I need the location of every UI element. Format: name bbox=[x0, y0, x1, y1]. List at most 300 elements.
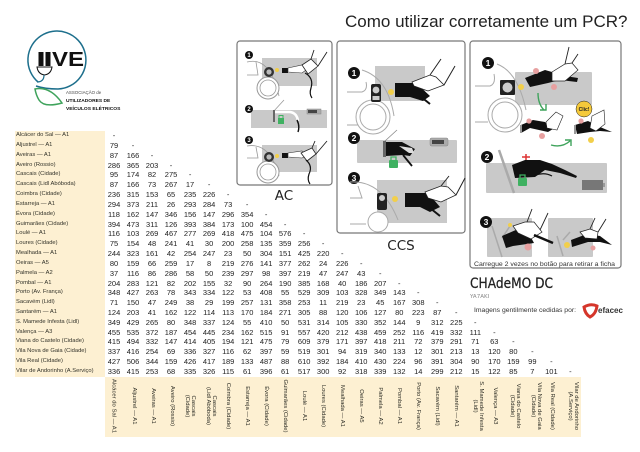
table: distance values: 459 bbox=[374, 328, 386, 337]
table: row labels: Vilar de Andorinho (A.Serviço) bbox=[16, 368, 94, 374]
step 3 CCS: 3 bbox=[352, 173, 357, 183]
step 2 CCS bbox=[348, 130, 457, 168]
table: distance values: 326 bbox=[203, 367, 215, 376]
table: column labels: Pombal — A1 bbox=[396, 388, 402, 424]
table: distance values: 244 bbox=[108, 249, 120, 258]
logo caption bbox=[66, 90, 121, 112]
table: distance values: 301 bbox=[431, 347, 444, 356]
table: distance values: 535 bbox=[127, 328, 139, 337]
table: distance values: 92 bbox=[338, 367, 346, 376]
table: distance values: 14 bbox=[414, 367, 422, 376]
table: distance values: 71 bbox=[110, 298, 118, 307]
table: distance values: 283 bbox=[127, 279, 139, 288]
table: distance values: - bbox=[284, 220, 286, 229]
table: distance values: 7 bbox=[530, 367, 534, 376]
table: distance values: 212 bbox=[336, 328, 348, 337]
table: distance values: 377 bbox=[279, 259, 291, 268]
table: distance values: 311 bbox=[146, 220, 158, 229]
table: distance values: - bbox=[227, 190, 229, 199]
table: distance values: 494 bbox=[127, 337, 139, 346]
table: distance values: 309 bbox=[317, 288, 329, 297]
table: row labels: Sacavém (Lidl) bbox=[16, 299, 55, 305]
table: distance values: 397 bbox=[260, 347, 272, 356]
table: distance values: 53 bbox=[243, 288, 251, 297]
table: distance values: 135 bbox=[260, 239, 272, 248]
table: distance values: 13 bbox=[471, 347, 479, 356]
table: distance values: 529 bbox=[298, 288, 310, 297]
table: distance values: 48 bbox=[148, 239, 156, 248]
table: distance values: 62 bbox=[243, 347, 251, 356]
table: distance values: 576 bbox=[279, 229, 291, 238]
table: distance values: 517 bbox=[298, 367, 310, 376]
table: distance values: 336 bbox=[108, 367, 120, 376]
table: distance values: 224 bbox=[393, 357, 406, 366]
table: distance values: 397 bbox=[279, 269, 291, 278]
table: distance values: 247 bbox=[203, 249, 215, 258]
table: column labels: Viana do Castelo bbox=[515, 384, 521, 429]
table: distance values: 365 bbox=[127, 161, 139, 170]
table: distance values: 58 bbox=[186, 269, 194, 278]
table: distance values: 207 bbox=[374, 279, 386, 288]
table: distance values: 69 bbox=[167, 347, 175, 356]
table: distance values: 171 bbox=[336, 337, 348, 346]
table: distance values: 68 bbox=[167, 367, 175, 376]
table: distance values: 410 bbox=[260, 318, 272, 327]
table: distance values: 94 bbox=[338, 347, 346, 356]
table: distance values: 37 bbox=[110, 269, 118, 278]
table: distance values: 519 bbox=[298, 347, 310, 356]
table: column labels: Aljustrel — A1 bbox=[131, 388, 137, 424]
table: row labels: Pombal — A1 bbox=[16, 280, 51, 286]
table: distance values: 373 bbox=[127, 200, 139, 209]
table: distance values: 415 bbox=[127, 367, 139, 376]
logo: UVE association bbox=[28, 31, 121, 112]
table: distance values: 113 bbox=[222, 308, 234, 317]
step 2 AC: 2 bbox=[247, 107, 251, 113]
table: distance values: 66 bbox=[148, 259, 156, 268]
table: row labels: Vila Nova de Gaia (Cidade) bbox=[16, 348, 86, 354]
table: distance values: 247 bbox=[336, 269, 348, 278]
table: row labels: Porto (Av. França) bbox=[16, 289, 63, 295]
table: distance values: 284 bbox=[203, 200, 215, 209]
table: distance values: 103 bbox=[127, 229, 139, 238]
table: distance values: - bbox=[360, 259, 362, 268]
table: distance values: 23 bbox=[357, 298, 365, 307]
table: distance values: 348 bbox=[108, 288, 120, 297]
table: distance values: 609 bbox=[298, 337, 310, 346]
table: distance values: 120 bbox=[488, 347, 501, 356]
table: row labels: Cascais (Cidade) bbox=[16, 171, 60, 177]
table: distance values: 323 bbox=[127, 249, 139, 258]
table: distance values: 410 bbox=[355, 357, 367, 366]
table: distance values: 211 bbox=[146, 200, 158, 209]
table: row labels: Aveiras — A1 bbox=[16, 152, 51, 158]
panel: CHAdeMO bbox=[470, 41, 621, 268]
table: distance values: 328 bbox=[355, 288, 367, 297]
table: column labels bbox=[110, 379, 579, 433]
table: distance values: 358 bbox=[279, 298, 291, 307]
step 2 CCS: 2 bbox=[352, 133, 357, 143]
table: distance values: 344 bbox=[146, 357, 158, 366]
table: distance values: 132 bbox=[393, 367, 406, 376]
table: distance values: 23 bbox=[224, 249, 232, 258]
table: distance values: 213 bbox=[450, 347, 463, 356]
table: distance values: 159 bbox=[127, 259, 139, 268]
step 1 AC bbox=[245, 50, 327, 99]
table: distance values: 115 bbox=[222, 367, 234, 376]
table: distance values: 133 bbox=[241, 357, 253, 366]
table: row labels: Oeiras — A5 bbox=[16, 260, 49, 266]
table: row labels: Aljustrel — A1 bbox=[16, 142, 52, 148]
table: column labels: Porto (Av. França) bbox=[415, 382, 421, 430]
table: distance values: 147 bbox=[146, 210, 158, 219]
table: distance values: 85 bbox=[509, 367, 518, 376]
table: distance values: 127 bbox=[374, 308, 386, 317]
table: distance values: 162 bbox=[127, 210, 139, 219]
icon: click burst: Clic! bbox=[579, 107, 590, 113]
table: distance values: 379 bbox=[317, 337, 329, 346]
table: row labels: Coimbra (Cidade) bbox=[16, 191, 62, 197]
table: distance values: 15 bbox=[471, 367, 479, 376]
step 3 CCS bbox=[348, 172, 465, 232]
table: row labels bbox=[15, 131, 105, 377]
table: distance values: - bbox=[246, 200, 248, 209]
table: distance values: 392 bbox=[317, 357, 329, 366]
table: distance values: 336 bbox=[184, 347, 196, 356]
table: distance values: 61 bbox=[243, 367, 251, 376]
table: distance values: 202 bbox=[184, 279, 196, 288]
table: distance values: 226 bbox=[336, 259, 348, 268]
table: distance values: 427 bbox=[127, 288, 139, 297]
table: distance values: 352 bbox=[374, 318, 386, 327]
table: distance values: 235 bbox=[184, 190, 196, 199]
table: distance values: 414 bbox=[184, 337, 196, 346]
table: distance values: 340 bbox=[374, 347, 386, 356]
table: column labels: Coimbra (Cidade) bbox=[225, 383, 231, 429]
caption: CHAdeMO: Carregue 2 vezes no botão para retirar a ficha bbox=[474, 261, 615, 268]
table: distance values: 79 bbox=[281, 337, 289, 346]
table: distance values: 349 bbox=[374, 288, 386, 297]
table: distance values: 405 bbox=[203, 337, 215, 346]
table: distance values: 87 bbox=[433, 308, 441, 317]
table: distance values: - bbox=[113, 131, 115, 140]
table: distance values: 219 bbox=[298, 269, 310, 278]
table: distance values: - bbox=[436, 298, 439, 307]
table: distance values: 88 bbox=[319, 308, 327, 317]
table: distance values: - bbox=[151, 151, 153, 160]
table: column labels: Loulé — A1 bbox=[301, 391, 307, 421]
table: distance values: 203 bbox=[146, 161, 158, 170]
table: distance values: - bbox=[550, 357, 553, 366]
table: distance values: 159 bbox=[507, 357, 520, 366]
table: distance values: 78 bbox=[167, 288, 175, 297]
table: distance values: 124 bbox=[108, 308, 120, 317]
table: distance values: 259 bbox=[165, 259, 177, 268]
table: distance values: 75 bbox=[110, 239, 118, 248]
table: distance values: 90 bbox=[471, 357, 479, 366]
table: distance values: 116 bbox=[412, 328, 424, 337]
step 2 CHAdeMO: 2 bbox=[485, 152, 490, 162]
table: distance values: 258 bbox=[241, 239, 253, 248]
table: distance values bbox=[108, 131, 572, 376]
table: distance values: 116 bbox=[222, 347, 234, 356]
table: distance values: 396 bbox=[260, 367, 272, 376]
table: distance values: 337 bbox=[203, 318, 215, 327]
table: distance values: 147 bbox=[203, 210, 215, 219]
table: distance values: 162 bbox=[165, 308, 177, 317]
table: column labels: Aveiras — A1 bbox=[150, 388, 156, 424]
table: distance values: 506 bbox=[127, 357, 139, 366]
table: distance values: - bbox=[455, 308, 458, 317]
table: distance values: - bbox=[569, 367, 572, 376]
table: column labels: Sacavém (Lidl) bbox=[434, 386, 440, 426]
table: distance values: 330 bbox=[355, 318, 367, 327]
table: distance values: 275 bbox=[165, 170, 177, 179]
table: distance values: 82 bbox=[167, 279, 175, 288]
table: distance values: 223 bbox=[412, 308, 425, 317]
table: distance values: 122 bbox=[488, 367, 501, 376]
table: distance values: 41 bbox=[148, 308, 156, 317]
table: distance values: 286 bbox=[165, 269, 177, 278]
table: distance values: 304 bbox=[450, 357, 463, 366]
table: distance values: 234 bbox=[222, 328, 234, 337]
table: distance values: 426 bbox=[184, 357, 196, 366]
table: distance values: 417 bbox=[203, 357, 215, 366]
table: distance values: 131 bbox=[260, 298, 272, 307]
table: column labels: Santarém — A1 bbox=[453, 385, 459, 427]
table: distance values: 86 bbox=[148, 269, 156, 278]
table: distance values: 24 bbox=[319, 259, 327, 268]
table: distance values: 96 bbox=[414, 357, 422, 366]
table: row labels: Santarém — A1 bbox=[16, 309, 57, 315]
table: distance values: 515 bbox=[260, 328, 272, 337]
table: distance values: 219 bbox=[222, 259, 234, 268]
label: CHAdeMO DC: CHAdeMO DC bbox=[470, 276, 553, 292]
logo: efacec: efacec bbox=[598, 306, 623, 315]
table: distance values: 475 bbox=[260, 337, 272, 346]
table: distance values: 17 bbox=[186, 180, 194, 189]
table: distance values: 111 bbox=[470, 328, 481, 337]
table: distance values: 41 bbox=[186, 239, 194, 248]
table: column labels: Oeiras — A5 bbox=[358, 389, 364, 423]
table: distance values: 203 bbox=[127, 308, 139, 317]
table: distance values: 141 bbox=[260, 259, 272, 268]
table: distance values: 55 bbox=[281, 288, 289, 297]
table: row labels: Valença — A3 bbox=[16, 329, 52, 335]
table: distance values: - bbox=[303, 229, 305, 238]
table: row labels: Guimarães (Cidade) bbox=[16, 221, 68, 227]
table: distance values: 394 bbox=[108, 220, 120, 229]
table: column labels: Vila Real (Cidade) bbox=[549, 382, 555, 430]
table: row labels: Mealhada — A1 bbox=[16, 250, 57, 256]
table: distance values: 297 bbox=[241, 269, 253, 278]
step 1 CCS: 1 bbox=[352, 68, 357, 78]
table: column labels: Cascais bbox=[190, 396, 196, 417]
table: distance values: 154 bbox=[127, 239, 139, 248]
table: distance values: 121 bbox=[241, 337, 253, 346]
table: distance values: 79 bbox=[110, 141, 118, 150]
table: distance values: 429 bbox=[127, 318, 139, 327]
table: distance values: 59 bbox=[281, 347, 289, 356]
table: distance values: 262 bbox=[298, 259, 310, 268]
table: column labels: Loures (Cidade) bbox=[320, 385, 326, 427]
table: distance values: 269 bbox=[203, 229, 215, 238]
table: distance values: 419 bbox=[431, 328, 444, 337]
table: distance values: 143 bbox=[393, 288, 406, 297]
label: AC: AC bbox=[275, 188, 293, 204]
table: distance values: 162 bbox=[241, 328, 253, 337]
table: column labels: Évora (Cidade) bbox=[263, 386, 270, 426]
table: distance values: 271 bbox=[279, 308, 291, 317]
arrow: right bbox=[551, 140, 571, 146]
table: distance values: 174 bbox=[127, 170, 139, 179]
table: distance values: 122 bbox=[184, 308, 196, 317]
table: column labels: Guimarães (Cidade) bbox=[282, 379, 288, 433]
table: distance values: 372 bbox=[146, 328, 158, 337]
table: distance values: 293 bbox=[184, 200, 196, 209]
table: distance values: 65 bbox=[167, 190, 175, 199]
table: distance values: 455 bbox=[108, 328, 120, 337]
table: distance values: 277 bbox=[184, 229, 196, 238]
table: distance values: 300 bbox=[317, 367, 329, 376]
table: distance values: 121 bbox=[146, 279, 158, 288]
table: distance values: 348 bbox=[184, 318, 196, 327]
table: column labels: (Cidade) bbox=[530, 395, 536, 417]
table: distance values: 90 bbox=[243, 279, 251, 288]
table: distance values: 88 bbox=[281, 357, 289, 366]
table: distance values: 264 bbox=[260, 279, 272, 288]
table: distance values: 72 bbox=[414, 337, 422, 346]
table: distance values: 133 bbox=[393, 347, 406, 356]
table: distance values: 50 bbox=[205, 269, 213, 278]
table: distance values: 225 bbox=[450, 318, 463, 327]
table: distance values: 315 bbox=[127, 190, 139, 199]
table: distance values: 438 bbox=[355, 328, 367, 337]
table: row labels: S. Mamede Infesta (Lidl) bbox=[16, 319, 79, 325]
table: row labels: Alcácer do Sal — A1 bbox=[16, 132, 69, 138]
table: distance values: 263 bbox=[146, 288, 158, 297]
logo wordmark: VE bbox=[52, 49, 84, 71]
table: distance values: 32 bbox=[224, 279, 232, 288]
table: distance values: 30 bbox=[205, 239, 213, 248]
table: distance values: 80 bbox=[167, 318, 175, 327]
table: column labels: S. Mamede Infesta bbox=[478, 381, 484, 431]
table: distance values: 427 bbox=[108, 357, 120, 366]
table: distance values: 166 bbox=[127, 180, 139, 189]
table: distance values: 418 bbox=[374, 337, 386, 346]
table: distance values: 29 bbox=[205, 298, 213, 307]
table: distance values: - bbox=[208, 180, 210, 189]
step 1 AC: 1 bbox=[247, 53, 251, 59]
table: distance values: 252 bbox=[393, 328, 406, 337]
table: distance values: 253 bbox=[146, 367, 158, 376]
table: column header background bbox=[105, 377, 581, 437]
table: distance values: 184 bbox=[336, 357, 348, 366]
table: distance values: 249 bbox=[165, 298, 177, 307]
table: distance values: 327 bbox=[203, 347, 215, 356]
table: distance values: 155 bbox=[203, 279, 215, 288]
table: distance values: 186 bbox=[355, 279, 367, 288]
logo caption: ASSOCIAÇÃO de bbox=[66, 90, 102, 95]
table: distance values: 557 bbox=[298, 328, 310, 337]
table: column labels: Alcácer do Sal — A1 bbox=[110, 379, 116, 433]
table: distance values: 118 bbox=[108, 210, 120, 219]
table: row labels: Vila Real (Cidade) bbox=[16, 358, 63, 364]
table: column labels: Palmela — A2 bbox=[377, 387, 383, 425]
table: distance values: 50 bbox=[281, 318, 289, 327]
table: distance values: 47 bbox=[319, 269, 327, 278]
table: distance values: 291 bbox=[450, 337, 463, 346]
table: distance values: 276 bbox=[241, 259, 253, 268]
table: distance values: 308 bbox=[412, 298, 425, 307]
table: distance values: 116 bbox=[108, 229, 120, 238]
table: distance values: 318 bbox=[355, 367, 367, 376]
table: distance values: 12 bbox=[414, 347, 422, 356]
label: CCS: CCS bbox=[387, 238, 415, 254]
table: column labels: Vilar de Andorinho bbox=[573, 382, 579, 431]
table: column labels: (Lidl Abóboda) bbox=[205, 387, 211, 425]
table: distance values: 114 bbox=[203, 308, 215, 317]
table: distance values: 17 bbox=[186, 259, 194, 268]
table: distance values: 397 bbox=[355, 337, 367, 346]
table: distance values: 236 bbox=[108, 190, 120, 199]
table: distance values: 105 bbox=[336, 318, 348, 327]
table: distance values: 87 bbox=[110, 151, 118, 160]
table: distance values: 339 bbox=[374, 367, 386, 376]
table: distance values: 349 bbox=[108, 318, 120, 327]
table: distance values: 150 bbox=[127, 298, 139, 307]
table: distance values: 156 bbox=[184, 210, 196, 219]
table: column labels: Cascais bbox=[211, 396, 217, 417]
table: distance values: 296 bbox=[222, 210, 234, 219]
table: distance values: 332 bbox=[450, 328, 463, 337]
table: distance values: 170 bbox=[241, 308, 253, 317]
table: distance values: 454 bbox=[260, 220, 272, 229]
table: distance values: - bbox=[398, 279, 400, 288]
logo caption: VEÍCULOS ELÉTRICOS bbox=[66, 104, 121, 112]
table: distance values: 120 bbox=[336, 308, 348, 317]
table: distance values: 467 bbox=[165, 229, 177, 238]
table: column labels: Mealhada — A1 bbox=[339, 385, 345, 427]
step 3 CHAdeMO bbox=[480, 209, 612, 257]
table: distance values: 50 bbox=[243, 249, 251, 258]
table: distance values: 116 bbox=[127, 269, 139, 278]
table: distance values: 98 bbox=[262, 269, 270, 278]
table: distance values: 475 bbox=[241, 229, 253, 238]
table: column labels: Valença — A3 bbox=[492, 388, 498, 425]
table: distance values: 73 bbox=[224, 200, 232, 209]
table: distance values: 61 bbox=[281, 367, 289, 376]
table: distance values: 204 bbox=[108, 279, 120, 288]
table: distance values: 454 bbox=[184, 328, 196, 337]
table: distance values: 153 bbox=[146, 190, 158, 199]
step 1 CCS bbox=[347, 59, 455, 134]
table: distance values: - bbox=[512, 337, 515, 346]
table: distance values: 269 bbox=[146, 229, 158, 238]
table: distance values: 11 bbox=[319, 298, 327, 307]
table: distance values: 161 bbox=[146, 249, 158, 258]
table: distance values: 104 bbox=[260, 229, 272, 238]
table: distance values: 124 bbox=[222, 318, 234, 327]
table: distance values: 219 bbox=[336, 298, 348, 307]
table: distance values: 151 bbox=[279, 249, 291, 258]
table: distance values: 101 bbox=[545, 367, 558, 376]
table: distance values: 332 bbox=[146, 337, 158, 346]
table: distance values: 9 bbox=[416, 318, 420, 327]
table: distance values: 106 bbox=[355, 308, 367, 317]
table: row labels: Palmela — A2 bbox=[16, 270, 53, 276]
table: distance values: 43 bbox=[357, 269, 365, 278]
